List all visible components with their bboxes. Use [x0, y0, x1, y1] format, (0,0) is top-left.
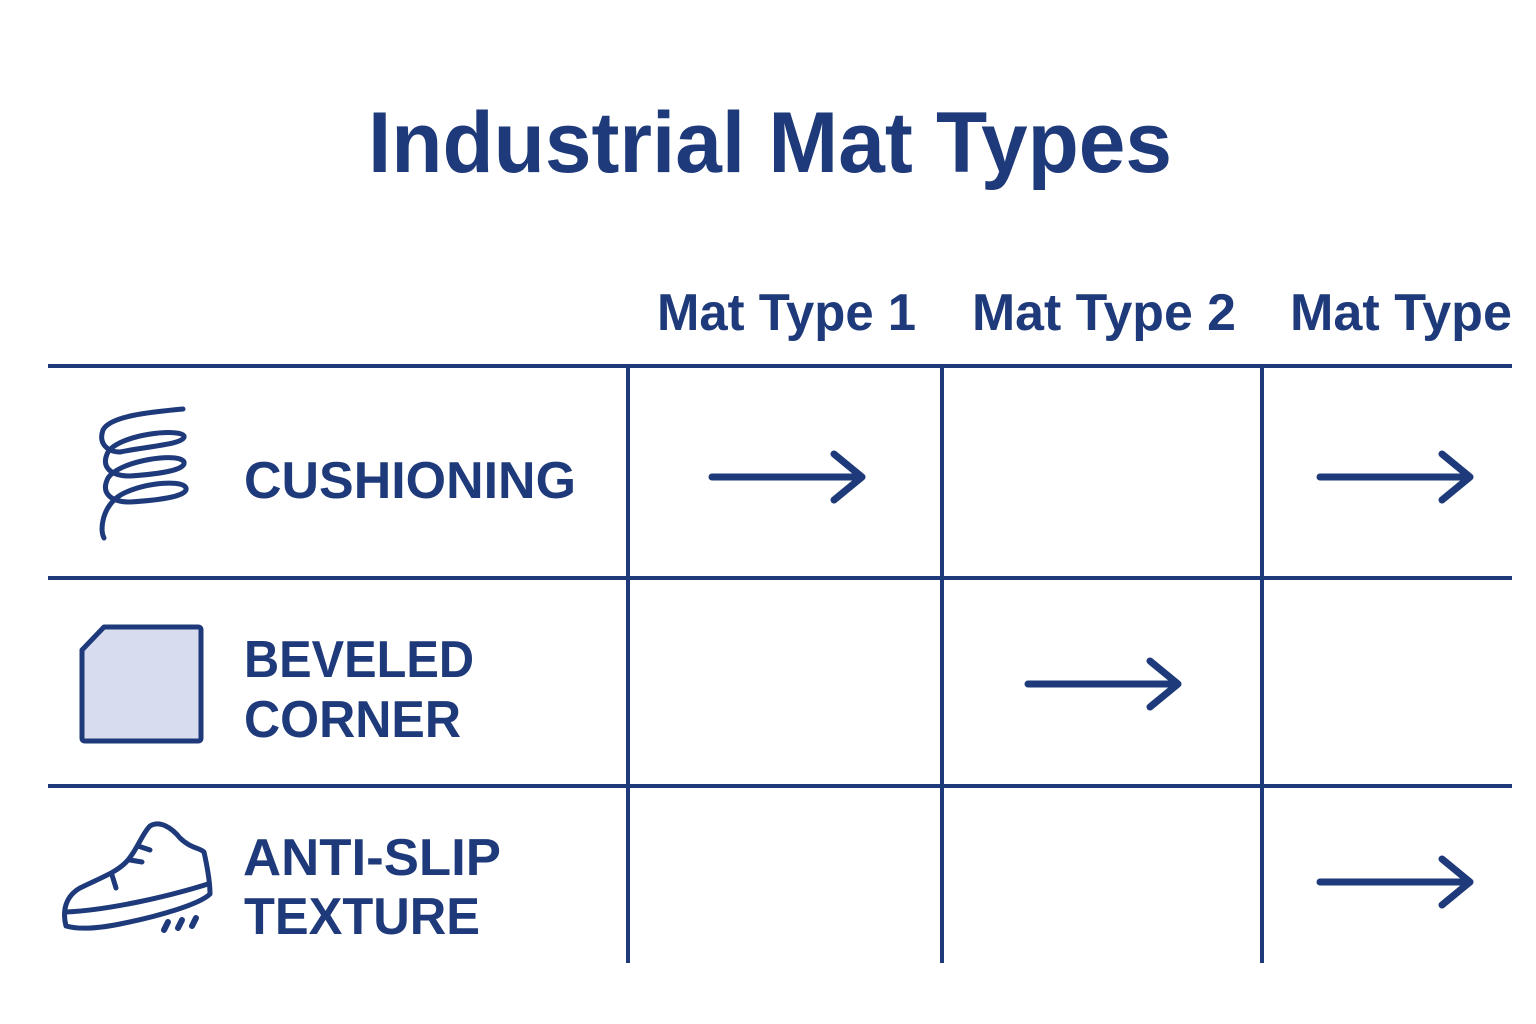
arrow: beveled type 2: [1028, 661, 1178, 707]
icon: beveled corner square: [82, 627, 201, 741]
arrow: anti-slip type 3: [1320, 859, 1470, 905]
icon: shoe: [65, 824, 210, 930]
column headers: Mat Type 2: [972, 284, 1236, 342]
label: anti-slip texture: TEXTURE: [244, 888, 480, 946]
arrow: cushioning type 3: [1320, 454, 1470, 500]
label: beveled corner: BEVELED: [244, 631, 474, 689]
column headers: Mat Type 1: [657, 284, 916, 342]
title: Industrial Mat Types: [368, 95, 1172, 191]
label: cushioning: CUSHIONING: [244, 452, 576, 510]
column headers: Mat Type: [1290, 284, 1512, 342]
label: anti-slip texture: ANTI-SLIP: [243, 829, 501, 887]
table grid: [48, 366, 1512, 963]
label: beveled corner: CORNER: [244, 691, 461, 749]
label: anti-slip texture: [243, 829, 501, 946]
label: beveled corner: [244, 631, 474, 749]
column headers: [657, 284, 1512, 342]
icon: spring: [102, 409, 186, 538]
arrow: cushioning type 1: [712, 454, 862, 500]
